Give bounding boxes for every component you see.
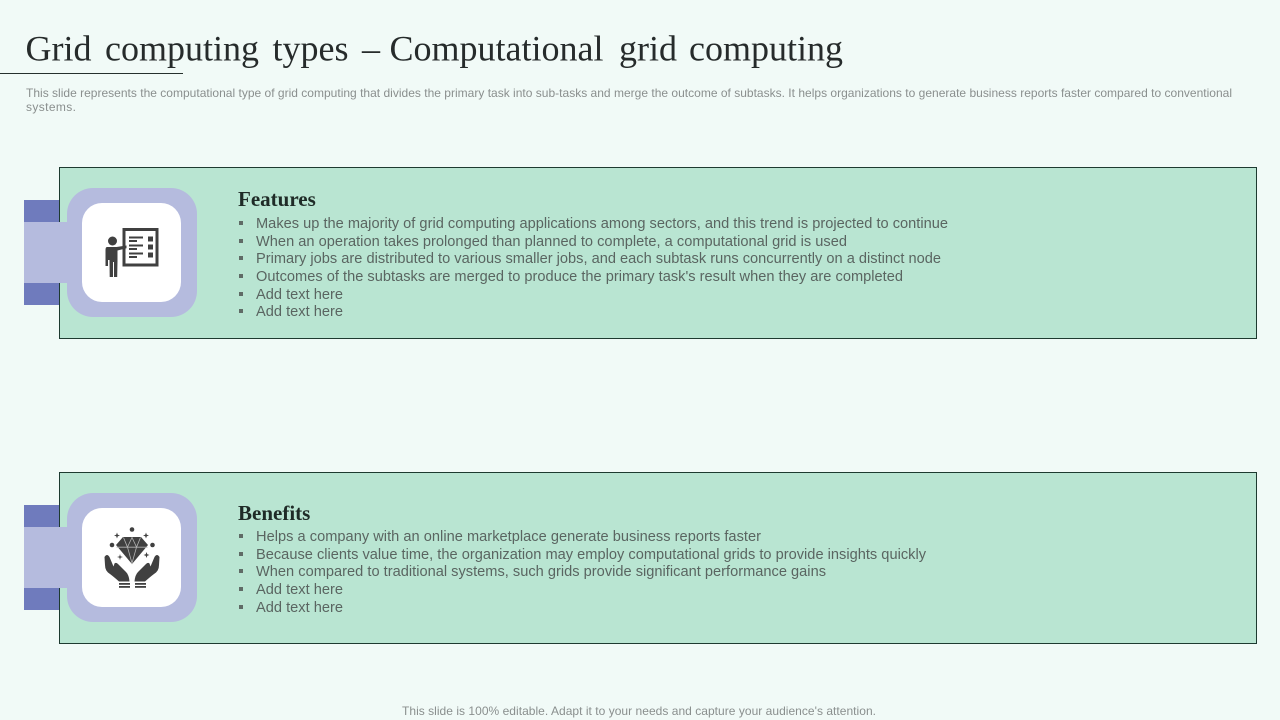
description text <box>26 86 1232 114</box>
features bullet list: Makes up the majority of grid computing applications among sectors, and this trend is projected to continue <box>256 216 948 232</box>
features bullet list: When an operation takes prolonged than planned to complete, a computational grid is used <box>256 234 847 250</box>
title: computing <box>105 28 259 68</box>
benefits heading: Benefits <box>238 501 310 525</box>
description text: systems. <box>26 100 76 114</box>
benefits bullet list <box>239 529 927 616</box>
benefits icon frame <box>67 493 197 622</box>
benefits bullet list: When compared to traditional systems, such grids provide significant performance gains <box>256 564 826 580</box>
description text: This slide represents the computational type of grid computing that divides the primary task into sub-tasks and merge the outcome of subtasks. It helps organizations to generate business reports faster compared to conventional <box>26 86 1232 100</box>
panel: benefits <box>24 472 1256 644</box>
features bullet list: Add text here <box>256 287 343 303</box>
icon: presenter at board <box>106 228 158 277</box>
benefits panel background <box>60 472 1256 644</box>
features bullet list: Add text here <box>256 304 343 320</box>
benefits connector band <box>24 527 84 588</box>
features icon frame <box>67 188 197 317</box>
title: – <box>361 28 381 68</box>
benefits connector tab <box>24 505 60 610</box>
benefits bullet list: Add text here <box>256 600 343 616</box>
features heading: Features <box>238 187 316 211</box>
title: Grid <box>26 28 92 68</box>
benefits bullet list: Helps a company with an online marketplace generate business reports faster <box>256 529 761 545</box>
title: types <box>272 28 348 68</box>
title: Computational <box>390 28 603 68</box>
icon: diamond in hands <box>104 527 160 588</box>
features bullet list: Primary jobs are distributed to various smaller jobs, and each subtask runs concurrently on a distinct node <box>256 251 941 267</box>
features connector tab <box>24 200 60 305</box>
benefits bullet list: Add text here <box>256 582 343 598</box>
benefits bullet list: Because clients value time, the organization may employ computational grids to provide insights quickly <box>256 547 927 563</box>
features bullet list: Outcomes of the subtasks are merged to produce the primary task's result when they are completed <box>256 269 903 285</box>
features panel background <box>60 168 1256 338</box>
panel: features <box>24 168 1256 338</box>
title: computing <box>689 28 843 68</box>
features connector band <box>24 222 84 283</box>
features bullet list <box>239 216 948 320</box>
footer note: This slide is 100% editable. Adapt it to your needs and capture your audience's attention. <box>402 704 876 718</box>
title: grid <box>619 28 677 68</box>
